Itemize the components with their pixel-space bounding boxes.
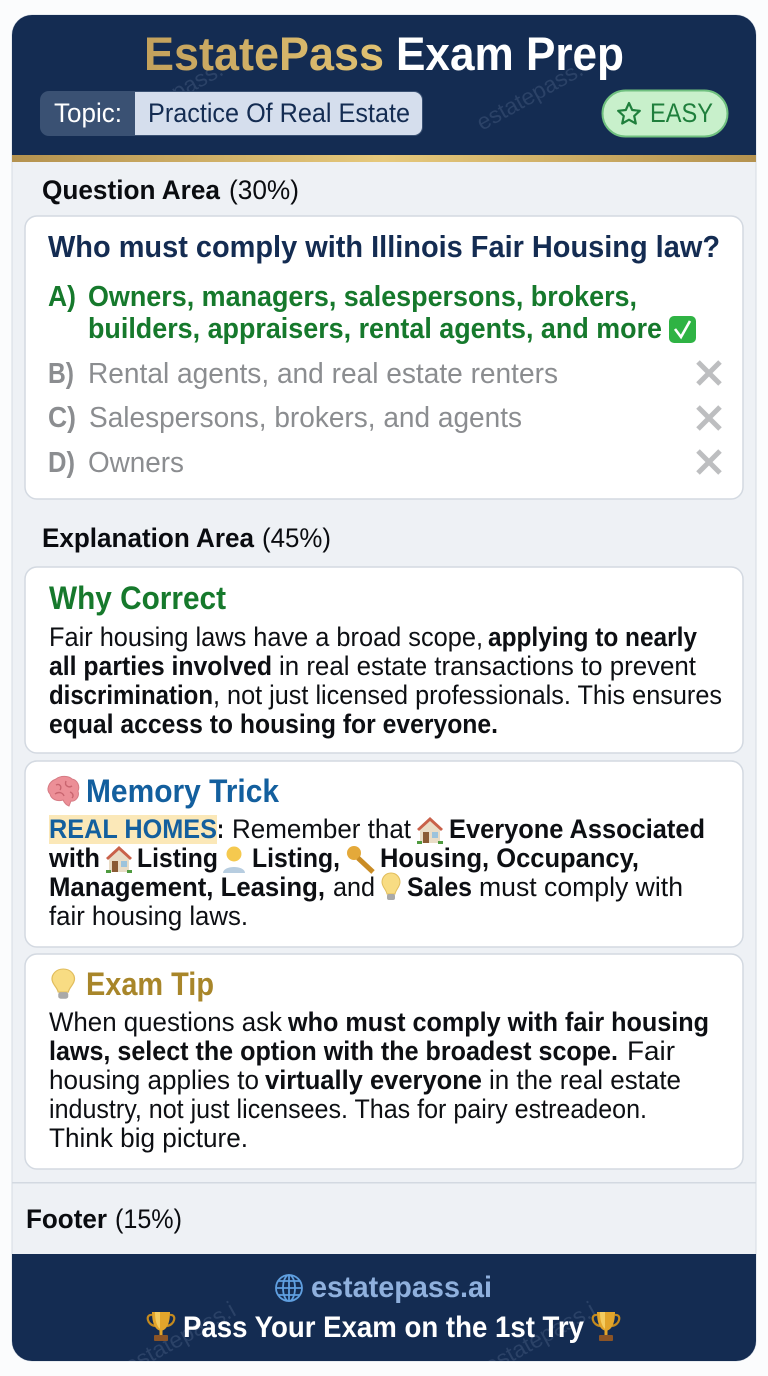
answer B: Rental agents, and real estate renters [88,358,558,390]
panel: exam tip [25,954,743,1169]
icon: trophy right [593,1312,619,1341]
body text: When questions ask [49,1007,282,1037]
body text: , not just licensed professionals. This ensures [213,680,722,710]
heading: Why Correct [49,580,226,616]
footer band: estatepass.i [120,1296,240,1376]
body text: Listing [137,843,218,873]
body text [48,814,705,931]
body text: Fair [627,1036,675,1066]
panel: question [25,216,743,499]
body text: must comply with [479,872,683,902]
header band: estatepass. [112,56,227,135]
body text: in the real estate [489,1065,681,1095]
icon: globe [276,1275,302,1301]
body text: and [333,872,375,902]
answer C: C) [48,402,76,434]
body text: Everyone Associated [449,814,705,844]
body text: laws, select the option with the broadest scope. [49,1036,618,1066]
heading: Exam Tip [86,966,214,1002]
answer B: B) [48,358,74,390]
title [144,27,624,80]
heading: question area: (30%) [229,175,299,205]
body text: with [48,843,100,873]
body text: housing applies to [49,1065,259,1095]
answer D: D) [48,447,75,479]
body text: Housing, Occupancy, [380,843,639,873]
topic pill [40,91,423,136]
answer A correct: builders, appraisers, rental agents, and more [88,313,662,345]
body text [49,622,722,739]
tagline: Pass Your Exam on the 1st Try [183,1311,584,1344]
header band [12,15,756,162]
icon: light bulb [52,969,74,999]
body text [49,1007,709,1153]
body text: Sales [407,872,472,902]
website: estatepass.ai [311,1271,492,1304]
icon: key [347,846,373,872]
body text: industry, not just licensees. Thas for pairy estreadeon. [49,1094,647,1124]
body text: discrimination [49,680,213,710]
heading: explanation area: (45%) [262,523,331,553]
answer C [48,402,720,434]
body text: Remember that [232,814,411,844]
answer C: Salespersons, brokers, and agents [89,402,522,434]
answer A correct [48,281,696,345]
body text: who must comply with fair housing [287,1007,709,1037]
panel: memory trick [25,761,743,947]
divider [12,1182,756,1184]
heading: question area: Question Area [42,175,220,205]
heading: explanation area: Explanation Area [42,523,254,553]
body text: Think big picture. [49,1123,248,1153]
header band: estatepass. [472,56,587,135]
heading: footer: (15%) [115,1204,182,1234]
topic pill: Practice Of Real Estate [148,98,410,128]
body text: applying to nearly [488,622,697,652]
icon: trophy left [148,1312,174,1341]
panel: why correct [25,567,743,753]
footer band [12,1254,756,1361]
body text: REAL HOMES [49,814,217,844]
body text: equal access to housing for everyone. [49,709,498,739]
icon: brain [48,776,79,806]
body text: fair housing laws. [49,901,248,931]
body text: in real estate transactions to prevent [279,651,696,681]
question text: Who must comply with Illinois Fair Housing law? [48,229,720,264]
body text: Fair housing laws have a broad scope, [49,622,483,652]
icon: person [223,846,245,873]
difficulty badge [602,90,728,136]
heading: footer [26,1204,182,1234]
answer D: Owners [88,447,184,479]
difficulty badge: EASY [650,98,713,128]
body text: Management, Leasing, [49,872,325,902]
body text: virtually everyone [265,1065,482,1095]
answer A correct: A) [48,281,76,313]
mnemonic highlight [49,815,217,844]
heading: footer: Footer [26,1204,107,1234]
title: EstatePass [144,27,384,80]
body text: Listing, [252,843,340,873]
body text: : [217,814,224,844]
footer band: estatepass.i [480,1296,600,1376]
body text: all parties involved [49,651,272,681]
heading: Memory Trick [86,773,279,809]
topic pill: Topic: [54,98,122,128]
title: Exam Prep [396,27,624,80]
answer A correct: Owners, managers, salespersons, brokers, [88,281,637,313]
answer D [48,447,720,479]
